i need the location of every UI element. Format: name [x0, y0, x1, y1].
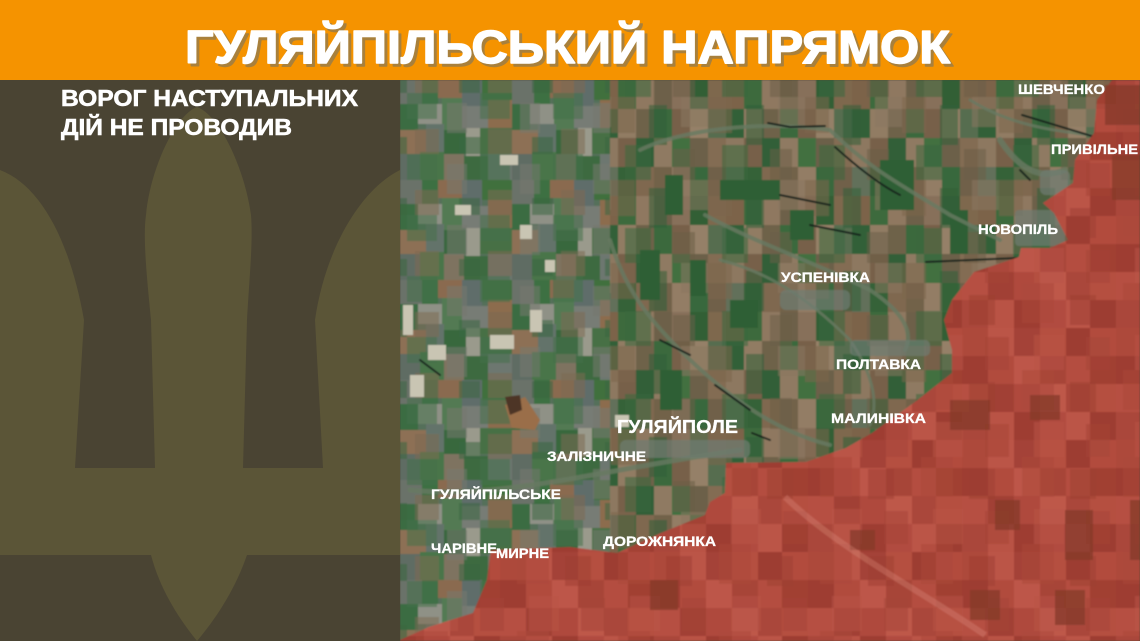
header bar [0, 0, 1140, 80]
icon: trident emblem [0, 107, 400, 641]
map labels: УСПЕНІВКА [781, 269, 870, 285]
map: brown patch [505, 397, 540, 430]
text block: situation summary: ДІЙ НЕ ПРОВОДИВ [61, 113, 292, 140]
map labels [431, 81, 1138, 561]
panel: satellite map [400, 80, 1140, 641]
text block: situation summary: ВОРОГ НАСТУПАЛЬНИХ [61, 85, 359, 111]
map: red occupied-zone fields [400, 80, 1140, 641]
left panel background [0, 80, 400, 641]
map labels: ДОРОЖНЯНКА [603, 533, 716, 549]
map labels: ЧАРІВНЕ [431, 540, 497, 556]
map: pale gully through red zone [785, 497, 985, 635]
map labels: ГУЛЯЙПОЛЕ [617, 416, 738, 437]
title: ГУЛЯЙПІЛЬСЬКИЙ НАПРЯМОК [188, 24, 954, 76]
map labels: ЗАЛІЗНИЧНЕ [547, 448, 646, 464]
map: pale fields west [403, 155, 629, 427]
map: farm fields [400, 80, 1140, 641]
map labels: НОВОПІЛЬ [978, 221, 1058, 237]
title: ГУЛЯЙПІЛЬСЬКИЙ НАПРЯМОК [185, 21, 951, 73]
text block: situation summary [61, 85, 359, 140]
map: dark ravines [420, 115, 1095, 440]
map labels: ШЕВЧЕНКО [1018, 81, 1105, 97]
map: red occupied zone [400, 80, 1140, 641]
map: town grey patches [620, 170, 1070, 458]
map labels: МАЛИНІВКА [831, 410, 926, 426]
map labels: ПОЛТАВКА [836, 356, 921, 372]
map labels: МИРНЕ [496, 545, 549, 561]
map: gullies and settlements [410, 100, 1090, 492]
map: dark red fields [650, 85, 1140, 625]
map labels: ПРИВІЛЬНЕ [1051, 141, 1138, 157]
map labels: ГУЛЯЙПІЛЬСЬКЕ [431, 485, 561, 502]
map: large green fields [640, 160, 968, 410]
